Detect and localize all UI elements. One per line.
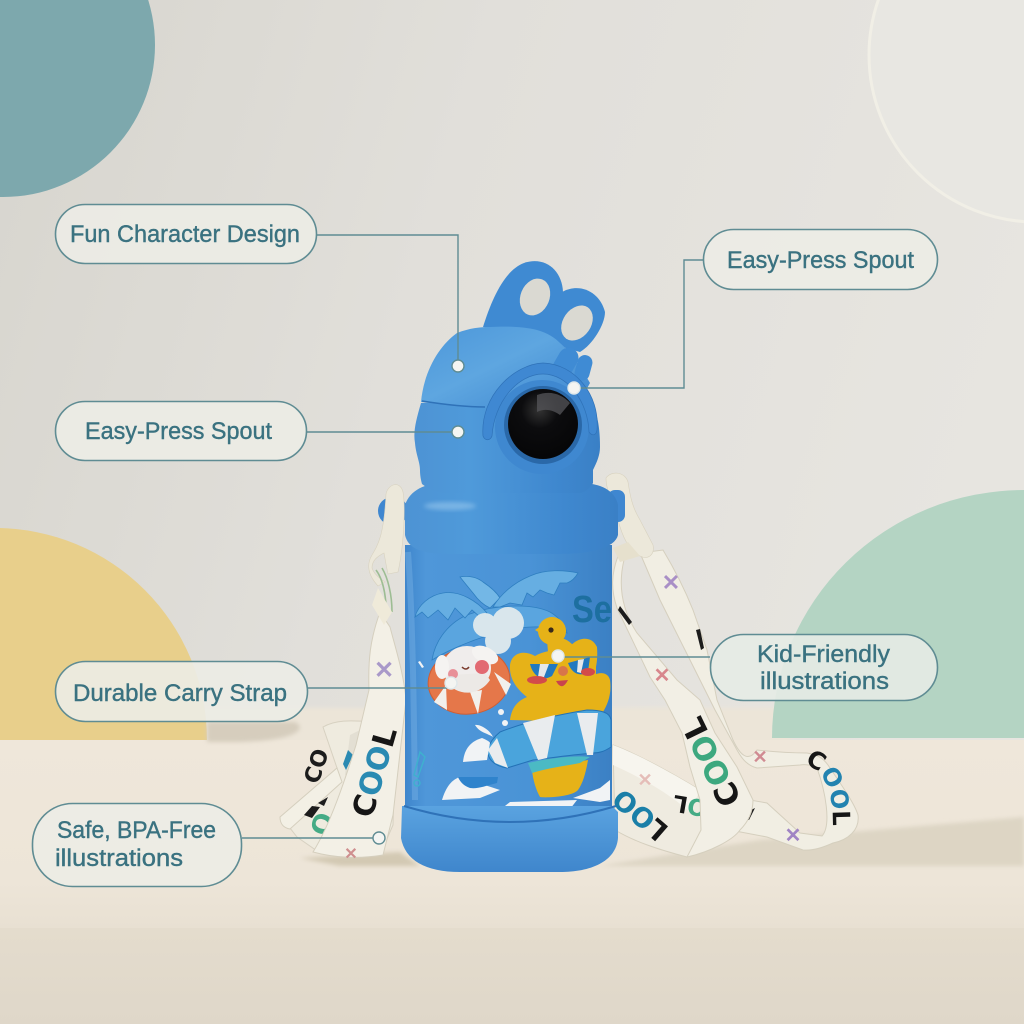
main right strap (613, 556, 753, 857)
label: Safe, BPA-Free illustrations: Safe, BPA-Free (57, 817, 216, 844)
main right strap: ✕ (654, 665, 670, 687)
illustration: palm leaves (415, 571, 578, 660)
strap letters: CO (300, 746, 335, 787)
illustration: exclamation mark (414, 752, 425, 786)
main left strap: ✕ (374, 657, 394, 684)
label: Kid-Friendly illustrations: Kid-Friendly (757, 641, 890, 668)
decorative white circle (869, 0, 1024, 222)
lower strap loop (607, 745, 709, 857)
folded strap piece (280, 768, 342, 829)
strap ring left (369, 485, 408, 625)
label: Kid-Friendly illustrations: illustrations (760, 668, 889, 695)
bottle base (401, 806, 618, 872)
strap letters: COOL (346, 723, 405, 821)
illustration: waves and splashes (418, 661, 610, 813)
illustration: blue splash (458, 777, 498, 788)
callout: leader lines (242, 235, 710, 838)
main left strap (313, 612, 406, 863)
strap cross marks (662, 570, 801, 847)
label: Easy-Press Spout left: Easy-Press Spout (85, 418, 272, 445)
label: Easy-Press Spout right: Easy-Press Spout (727, 247, 914, 274)
illustration: cloud (473, 607, 524, 654)
decorative teal circle (0, 0, 155, 197)
table shadows (207, 722, 1024, 866)
lower strap loop: OL (671, 789, 709, 821)
strap cross marks: ✕ (752, 747, 768, 767)
strap letter green: O (306, 809, 341, 840)
strap ring right (606, 473, 653, 557)
back loop of strap on the left (280, 721, 395, 855)
product: water bottle with strap (280, 261, 859, 872)
strap cross marks: ✕ (785, 825, 801, 847)
strap letters: COO L (808, 751, 850, 826)
table surface (0, 708, 1024, 1024)
spout ring and black cap (483, 363, 597, 474)
bottle head lower (414, 395, 600, 493)
callout: anchor dots (373, 360, 580, 844)
strap cross marks: ✕ (662, 570, 680, 595)
black cap (508, 389, 578, 459)
bottle body (405, 545, 612, 815)
label: Durable Carry Strap: Durable Carry Strap (73, 680, 287, 707)
illustration: bear legs (532, 760, 588, 797)
small nubs (549, 344, 594, 382)
label: Safe, BPA-Free illustrations (32, 804, 242, 886)
label: Safe, BPA-Free illustrations: illustrations (55, 845, 183, 872)
strap junction right (613, 542, 640, 562)
decorative yellow semicircle (0, 528, 207, 740)
bottle collar (405, 483, 625, 554)
second right strap strand (641, 550, 859, 850)
strap letters lower: LOO (607, 782, 674, 846)
bottle dome (421, 327, 590, 410)
decorative green semicircle (772, 490, 1024, 738)
illustration: striped swim ring (487, 710, 611, 773)
label: Kid-Friendly illustrations (710, 634, 938, 700)
rabbit ear left (483, 261, 563, 335)
label: Easy-Press Spout left (56, 402, 306, 460)
strap cross marks: ✕ (344, 846, 358, 863)
lower strap loop: ✕ (637, 770, 653, 790)
illustration: yellow bear with duck and sunglasses (510, 617, 610, 722)
strap letters: COOL (675, 711, 749, 812)
illustration: bunny in orange float (428, 646, 511, 715)
label: Fun Character Design (56, 204, 316, 264)
rabbit ear right (538, 288, 605, 352)
illustration: Sea text: Se (572, 589, 612, 631)
label: Fun Character Design: Fun Character Design (70, 221, 300, 248)
label: Easy-Press Spout right (704, 230, 938, 290)
label: Durable Carry Strap (56, 662, 308, 722)
